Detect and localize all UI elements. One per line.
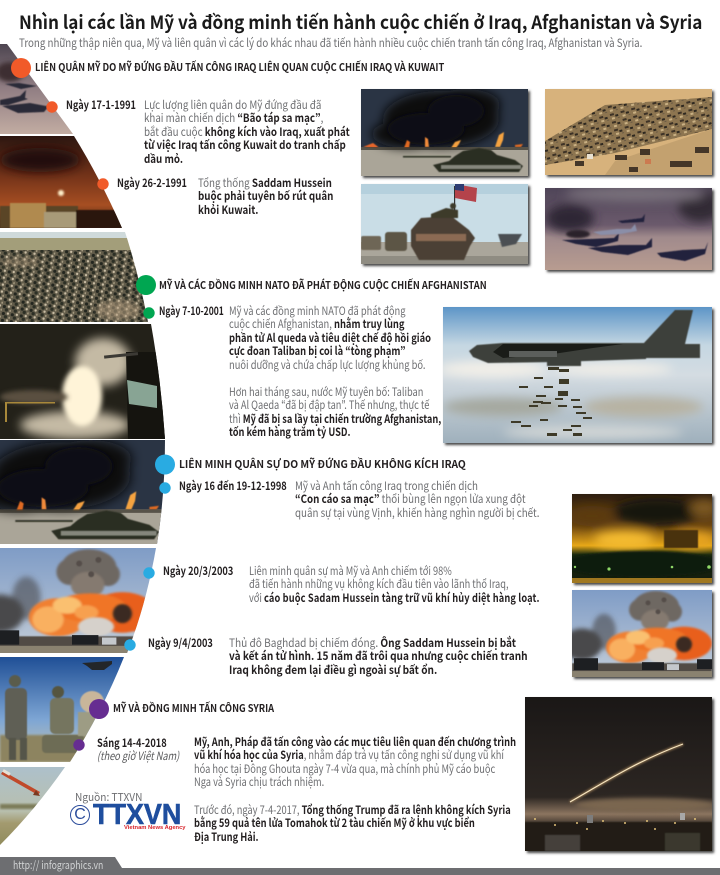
text: Afghanistan war start: Mỹ và các đồng minh NATO đã phát động	[229, 303, 406, 319]
logo: TTXVN	[70, 799, 186, 831]
strip photo: jets on runway	[0, 44, 80, 134]
text: Saddam withdrawal	[198, 175, 333, 218]
photo: armored vehicles with American flag	[361, 184, 530, 266]
text: Baghdad falls: và kết án tử hình. 15 năm đã trôi qua nhưng cuộc chiến tranh	[229, 648, 528, 664]
photo: tank before burning oil wells	[361, 89, 530, 178]
logo wordmark: TTXVN	[93, 799, 181, 831]
section heading: Iraq and Kuwait: LIÊN QUÂN MỸ DO MỸ ĐỨNG ĐẦU TẤN CÔNG IRAQ LIÊN QUAN CUỘC CHIẾN IRAQ VÀ KUWAIT	[35, 59, 444, 74]
strip photo: soldiers and helicopter	[0, 657, 130, 762]
timeline dot: 17-1-1991	[46, 101, 58, 113]
text: Desert Storm	[144, 97, 350, 167]
date: 26-2-1991: Ngày 26-2-1991	[117, 175, 187, 191]
text: 2017 Syria strikes: Địa Trung Hải.	[194, 829, 259, 845]
text: Afghanistan war start: cực đoan Taliban bị coi là “tòng phạm”	[229, 343, 406, 359]
timeline dot: section 1	[11, 58, 31, 78]
subtitle: Trong những thập niên qua, Mỹ và liên quân vì các lý do khác nhau đã tiến hành nhiều cuộc chiến tranh tấn công Iraq, Afghanistan và Syria.	[19, 35, 642, 51]
photo: burning Baghdad at night	[562, 494, 720, 585]
text: Afghanistan aftermath	[229, 384, 441, 440]
text: Desert Storm: Lực lượng liên quân do Mỹ đứng đầu đã	[144, 97, 321, 113]
date: 17-1-1991: Ngày 17-1-1991	[66, 97, 136, 113]
timeline dot: 26-2-1991	[97, 178, 109, 190]
text: Desert Fox: “Con cáo sa mạc” thổi bùng lên ngọn lửa xung đột	[295, 491, 526, 507]
text: 2003 air strikes: với cáo buộc Sadam Hussein tàng trữ vũ khí hủy diệt hàng loạt.	[249, 590, 540, 606]
timeline dot: section 4	[89, 699, 109, 719]
text: Baghdad falls: Iraq không đem lại điều gì ngoài sự bất ổn.	[229, 662, 437, 678]
strip photo: explosion	[0, 548, 156, 653]
section heading: Iraq air strikes: LIÊN MINH QUÂN SỰ DO MỸ ĐỨNG ĐẦU KHÔNG KÍCH IRAQ	[179, 456, 466, 471]
strip photo: missile launch from warship	[0, 324, 172, 440]
logo tagline: Vietnam News Agency	[124, 825, 186, 831]
text: Baghdad falls	[229, 635, 528, 678]
text: 2018 Syria strikes: vũ khí hóa học của Syria, nhằm đáp trả vụ tấn công nghi sử dụng vũ khí	[194, 747, 504, 763]
photo: B-52 bomber dropping bombs	[438, 307, 714, 445]
photo: explosion mushroom cloud	[562, 590, 714, 679]
text: Afghanistan aftermath: và Al Qaeda “đã bị đập tan”. Thế nhưng, thực tế	[229, 397, 429, 413]
strip photo: crowd of soldiers	[0, 232, 150, 322]
strip photo: night city under burning sky	[0, 136, 130, 228]
text: Afghanistan aftermath: thì Mỹ đã bị sa lầy tại chiến trường Afghanistan,	[229, 411, 441, 427]
text: Afghanistan war start: cuộc chiến Afghanistan, nhằm truy lùng	[229, 316, 404, 332]
text: Afghanistan war start	[229, 303, 431, 373]
text: 2017 Syria strikes	[194, 802, 511, 845]
photo: fighter jets over burning oil fields	[545, 186, 720, 272]
text: 2018 Syria strikes	[194, 734, 516, 790]
text: 2018 Syria strikes: Mỹ, Anh, Pháp đã tấn công vào các mục tiêu liên quan đến chương trình	[194, 734, 516, 750]
text: 2018 Syria strikes: Nga và Syria chịu trách nhiệm.	[194, 774, 324, 790]
timeline dot: 7-10-2001	[143, 307, 155, 319]
date: 14-4-2018: (theo giờ Việt Nam)	[97, 748, 179, 764]
text: Saddam withdrawal: Tổng thống Saddam Hussein	[198, 175, 332, 191]
date: 14-4-2018	[97, 735, 180, 764]
section heading: Syria: MỸ VÀ ĐỒNG MINH TẤN CÔNG SYRIA	[113, 700, 274, 715]
source credit: Nguồn: TTXVN	[75, 789, 142, 805]
text: Saddam withdrawal: buộc phải tuyên bố rút quân	[198, 188, 333, 204]
text: 2017 Syria strikes: bằng 59 quả tên lửa Tomahok từ 2 tàu chiến Mỹ ở khu vực biển	[194, 815, 475, 831]
text: Afghanistan war start: phần tử Al queda và tiêu diệt chế độ hồi giáo	[229, 330, 431, 346]
timeline dot: section 2	[136, 275, 156, 295]
text: Afghanistan war start: nuôi dưỡng và chứa chấp lực lượng khủng bố.	[229, 357, 426, 373]
text: Desert Fox	[295, 478, 539, 521]
strip photo: missile over landscape	[0, 767, 70, 847]
date: 7-10-2001: Ngày 7-10-2001	[159, 303, 224, 319]
text: Afghanistan aftermath: Hơn hai tháng sau, nước Mỹ tuyên bố: Taliban	[229, 384, 423, 400]
text: Desert Fox: Mỹ và Anh tấn công Iraq trong chiến dịch	[295, 478, 478, 494]
text: Desert Storm: dầu mỏ.	[144, 151, 183, 167]
date: 16-19-12-1998: Ngày 16 đến 19-12-1998	[179, 478, 287, 494]
text: Desert Storm: từ việc Iraq tấn công Kuwait do tranh chấp	[144, 137, 346, 153]
text: Afghanistan aftermath: tốn kém hàng trăm tỷ USD.	[229, 424, 350, 440]
text: 2003 air strikes: đã tiến hành những vụ không kích đầu tiên vào lãnh thổ Iraq,	[249, 576, 509, 592]
logo copyright mark: C	[74, 806, 86, 823]
date: 20/3/2003: Ngày 20/3/2003	[163, 563, 233, 579]
date: 9/4/2003: Ngày 9/4/2003	[148, 635, 213, 651]
text: Baghdad falls: Thủ đô Baghdad bị chiếm đóng. Ông Saddam Hussein bị bắt	[229, 635, 516, 651]
title: Nhìn lại các lần Mỹ và đồng minh tiến hành cuộc chiến ở Iraq, Afghanistan và Syria	[19, 9, 702, 35]
logo copyright mark	[70, 805, 90, 825]
photo: highway of wrecked vehicles in the desert	[545, 89, 714, 177]
text: 2003 air strikes	[249, 563, 540, 606]
timeline dot: section 3	[155, 454, 175, 474]
text: 2017 Syria strikes: Trước đó, ngày 7-4-2017, Tổng thống Trump đã ra lệnh không kích Syria	[194, 802, 511, 818]
timeline dot: 9/4/2003	[124, 639, 136, 651]
text: Desert Storm: bắt đầu cuộc không kích vào Iraq, xuất phát	[144, 124, 350, 140]
timeline dot: 20/3/2003	[143, 567, 155, 579]
text: Desert Storm: khai màn chiến dịch “Bão táp sa mạc”,	[144, 110, 323, 126]
footer bar	[0, 857, 720, 875]
text: 2003 air strikes: Liên minh quân sự mà Mỹ và Anh chiếm tới 98%	[249, 563, 452, 579]
left curved photo strip	[0, 44, 172, 847]
strip photo: oil-field fires and tank	[0, 440, 165, 544]
photo: missile streak over Damascus at night	[525, 697, 715, 853]
text: Saddam withdrawal: khỏi Kuwait.	[198, 202, 258, 218]
text: Desert Fox: quân sự tại vùng Vịnh, khiến hàng nghìn người bị chết.	[295, 505, 539, 521]
timeline dot: 14-4-2018	[73, 739, 85, 751]
footer url: http:// infographics.vn	[13, 857, 103, 873]
section heading: Afghanistan: MỸ VÀ CÁC ĐỒNG MINH NATO ĐÃ PHÁT ĐỘNG CUỘC CHIẾN AFGHANISTAN	[159, 277, 487, 292]
timeline dot: 16-19-12-1998	[159, 482, 171, 494]
date: 14-4-2018: Sáng 14-4-2018	[97, 735, 167, 751]
text: 2018 Syria strikes: hóa học tại Đông Ghouta ngày 7-4 vừa qua, mà chính phủ Mỹ cáo buộc	[194, 761, 495, 777]
